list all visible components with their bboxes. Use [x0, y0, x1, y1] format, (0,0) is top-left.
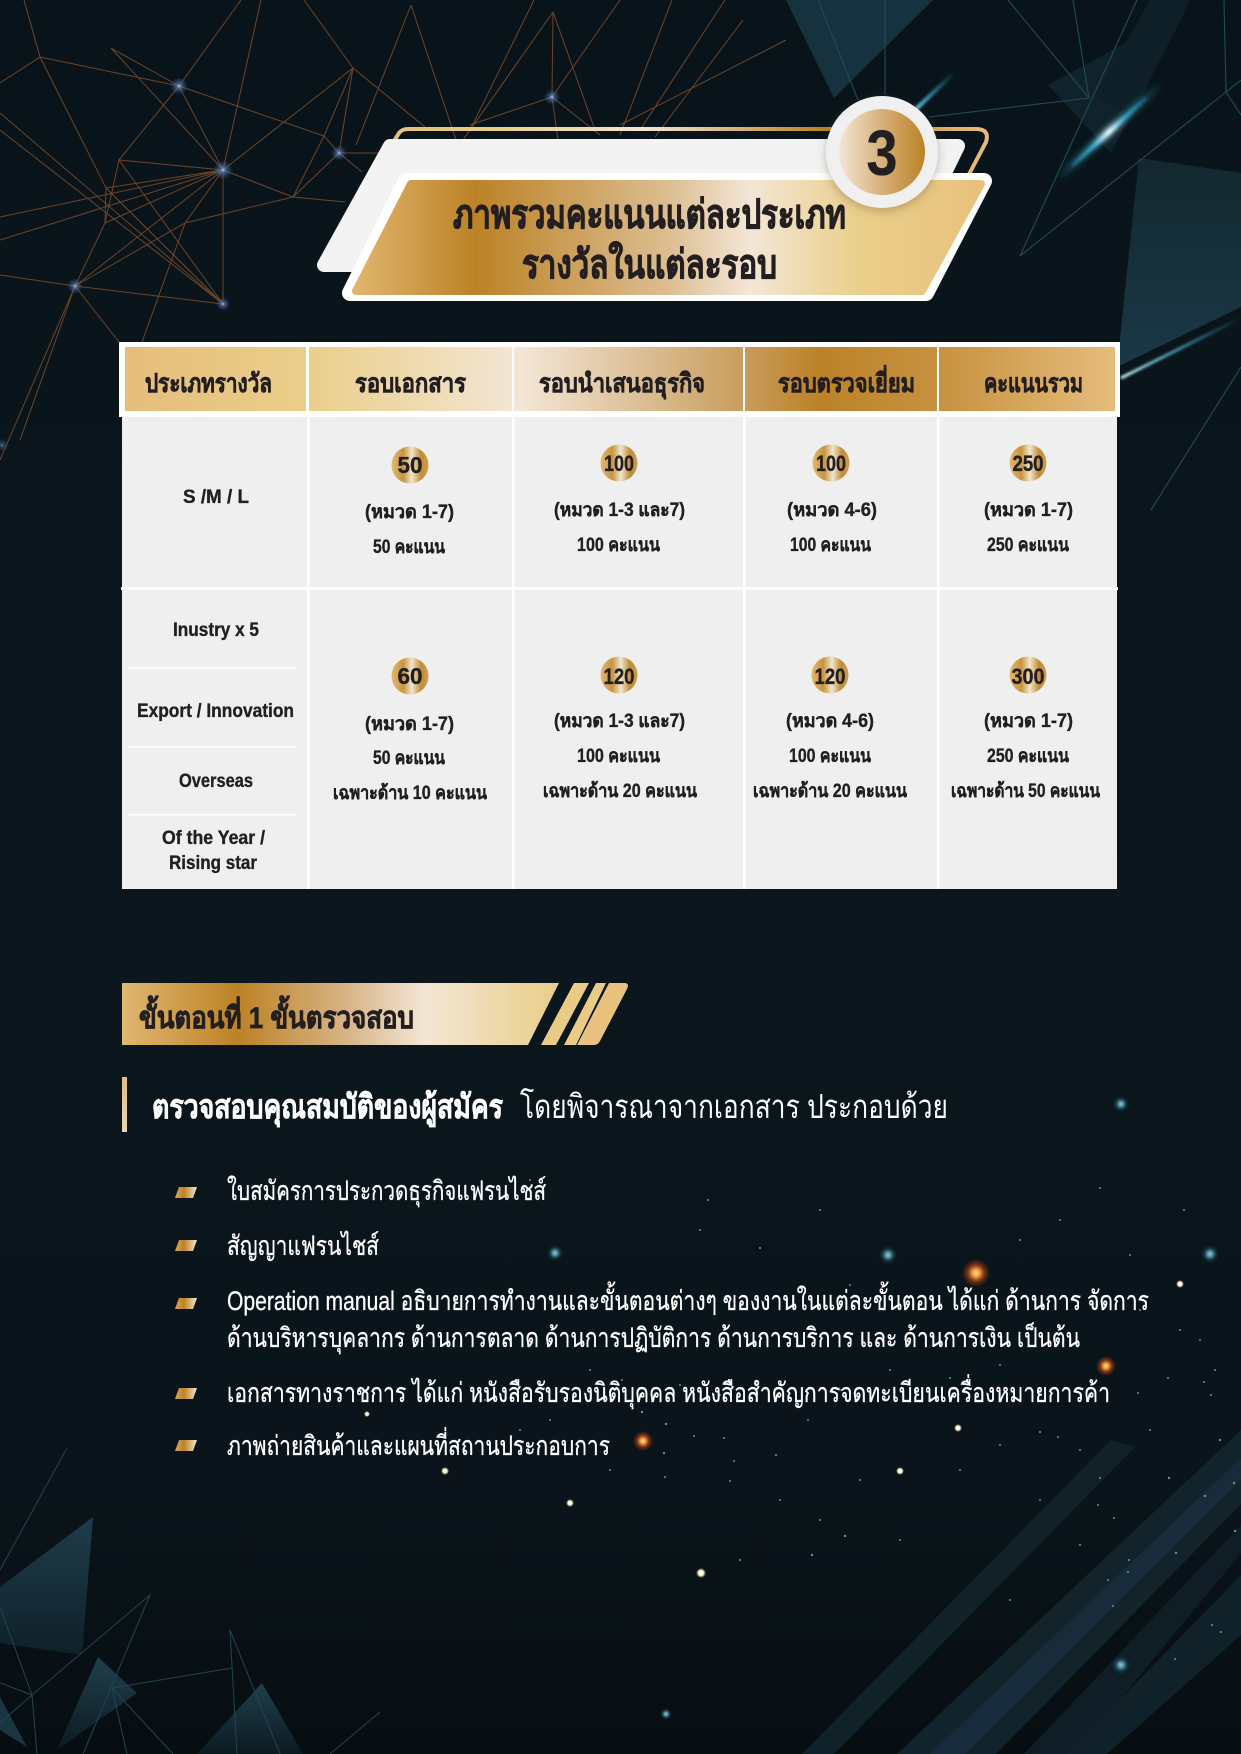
score 300 total: เฉพาะด้าน 50 คะแนน: [951, 780, 1100, 802]
score 100 document-presentation round: (หมวด 1-3 และ7): [554, 500, 685, 521]
row: special categories: Inustry x 5: [173, 620, 259, 641]
score 50: 50 คะแนน: [373, 537, 445, 558]
teal line network, bottom left: [0, 1448, 380, 1754]
table header row: รอบเอกสาร: [355, 368, 466, 398]
score 100 site-visit round: (หมวด 4-6): [787, 500, 877, 521]
item: application form: ใบสมัครการประกวดธุรกิจแฟรนไชส์: [227, 1175, 546, 1208]
small star dust: [484, 1179, 1236, 1660]
number badge 3: 3: [866, 117, 898, 189]
score 250 total: 250: [1012, 451, 1044, 476]
table header row: ประเภทรางวัล: [145, 368, 272, 398]
orange constellation network, top left: [0, 0, 786, 460]
item: franchise contract: สัญญาแฟรนไชส์: [227, 1230, 379, 1261]
score 250 total: (หมวด 1-7): [984, 500, 1073, 521]
score 100 document-presentation round: [554, 444, 685, 556]
title text: รางวัลในแต่ละรอบ: [522, 241, 777, 287]
network star nodes: [0, 77, 560, 452]
table body background: [122, 417, 1117, 889]
score 50: [365, 446, 454, 558]
row: S/M/L: S /M / L: [183, 487, 249, 508]
title text: [453, 193, 846, 287]
table grid lines: [121, 417, 1118, 889]
score 250 total: 250 คะแนน: [987, 535, 1069, 556]
score 120 site-visit round: (หมวด 4-6): [786, 711, 874, 732]
score 60: (หมวด 1-7): [365, 714, 454, 735]
item: franchise contract: [175, 1230, 379, 1261]
score 60: เฉพาะด้าน 10 คะแนน: [333, 782, 487, 804]
white back panel: [324, 146, 958, 265]
score 300 total: 250 คะแนน: [987, 746, 1069, 767]
score 300 total: (หมวด 1-7): [984, 711, 1073, 732]
white front panel border: [350, 181, 984, 293]
section bar: step 1: ขั้นตอนที่ 1 ขั้นตรวจสอบ: [139, 995, 414, 1035]
intro heading: ตรวจสอบคุณสมบัติของผู้สมัคร: [152, 1088, 503, 1128]
score 60: 50 คะแนน: [373, 748, 445, 769]
row: S/M/L: [183, 444, 1073, 558]
row: special categories: Overseas: [179, 771, 253, 792]
item: product photos and map: ภาพถ่ายสินค้าและแผนที่สถานประกอบการ: [227, 1427, 610, 1461]
row: special categories: [137, 620, 1100, 874]
score 120 site-visit round: เฉพาะด้าน 20 คะแนน: [753, 780, 907, 802]
score 300 total: 300: [1012, 664, 1044, 689]
table header row: รอบตรวจเยี่ยม: [778, 364, 915, 398]
gold title plate: [356, 184, 981, 291]
diagonal light bands, bottom right: [802, 1430, 1241, 1754]
item: product photos and map: [175, 1427, 610, 1461]
table header row: [119, 342, 1120, 417]
score 120 site-visit round: [753, 656, 907, 802]
score 50: (หมวด 1-7): [365, 502, 454, 523]
score 120 site-visit round: 120: [814, 664, 846, 689]
score 120 site-visit round: 100 คะแนน: [789, 746, 871, 767]
score 100 document-presentation round: 100 คะแนน: [577, 535, 660, 556]
score table: [119, 342, 1120, 889]
row: special categories: Rising star: [169, 853, 258, 874]
title banner: [324, 96, 987, 293]
gold outline frame: [391, 129, 987, 180]
score 60: [333, 658, 487, 804]
item: application form: [175, 1175, 546, 1208]
score 120 presentation round: 100 คะแนน: [577, 746, 660, 767]
score 100 site-visit round: 100: [816, 451, 846, 476]
title text: ภาพรวมคะแนนแต่ละประเภท: [453, 193, 846, 237]
table header row: คะแนนรวม: [984, 368, 1083, 398]
glowing stars: [364, 1096, 1219, 1720]
teal polygons, top right: [786, 0, 1241, 367]
intro heading: โดยพิจารณาจากเอกสาร ประกอบด้วย: [520, 1088, 948, 1125]
light flares: [915, 72, 1241, 378]
score 300 total: [951, 656, 1100, 802]
teal polygons, bottom left: [0, 1517, 303, 1754]
document checklist: [175, 1175, 1149, 1461]
table header row: รอบนำเสนอธุรกิจ: [539, 368, 705, 400]
score 100 site-visit round: 100 คะแนน: [790, 535, 871, 556]
row: special categories: Export / Innovation: [137, 701, 294, 722]
number badge 3: [826, 96, 938, 208]
teal line network, top right: [818, 0, 1241, 510]
row: special categories: Of the Year /: [162, 828, 266, 849]
score 120 presentation round: [543, 656, 697, 802]
score 120 presentation round: 120: [604, 664, 634, 689]
score 250 total: [984, 444, 1073, 556]
score 120 presentation round: เฉพาะด้าน 20 คะแนน: [543, 780, 697, 802]
intro heading: [122, 1077, 948, 1132]
score 100 document-presentation round: 100: [604, 451, 634, 476]
score 100 site-visit round: [787, 444, 877, 556]
score 50: 50: [398, 452, 422, 478]
item: operation manual: [175, 1281, 1149, 1355]
score 60: 60: [398, 663, 422, 689]
section bar: step 1: [122, 983, 628, 1045]
score 120 presentation round: (หมวด 1-3 และ7): [554, 711, 685, 732]
